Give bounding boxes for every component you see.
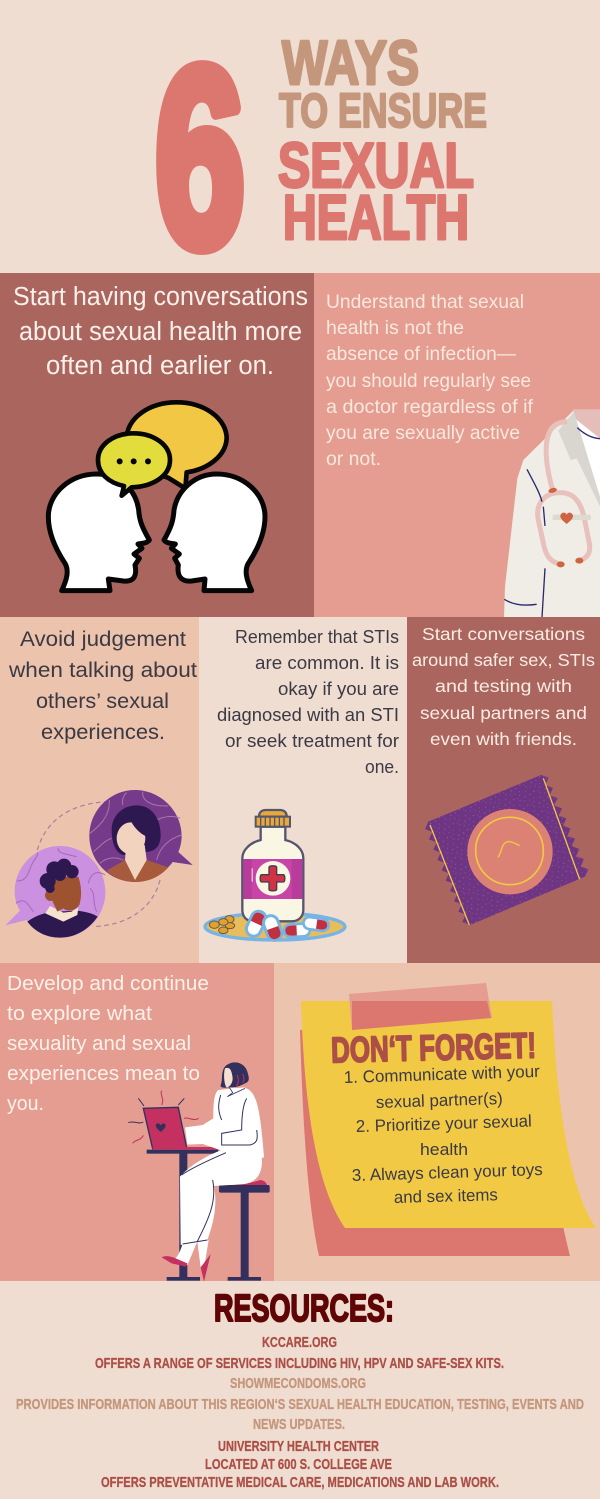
text: conversations	[13, 283, 308, 380]
text: avoid judgement	[8, 627, 197, 744]
text: explore sexuality	[7, 972, 209, 1115]
checklist: 3. Always clean your toys	[352, 1160, 543, 1185]
checklist	[344, 1062, 543, 1207]
text: conversations: often and earlier on.	[46, 352, 274, 380]
checklist: sexual partner(s)	[376, 1089, 503, 1112]
panel: start conversations around safer sex	[407, 617, 600, 963]
icon: two heads talking	[48, 402, 265, 591]
text: stis are common: are common. It is	[255, 653, 399, 673]
text: stis are common: Remember that STIs	[235, 627, 399, 647]
text: stis are common: or seek treatment for	[225, 731, 399, 751]
illustration: woman at laptop	[128, 1062, 270, 1282]
panel: start having conversations	[0, 273, 314, 617]
text: stis are common: diagnosed with an STI	[217, 705, 399, 725]
sticky note	[300, 983, 596, 1256]
resource: university health center: LOCATED AT 600 S. COLLEGE AVE	[205, 1457, 392, 1473]
panel: STIs are common	[199, 617, 407, 963]
checklist: health	[420, 1140, 468, 1159]
text: safer sex: even with friends.	[430, 729, 577, 749]
text: conversations: Start having conversations	[13, 283, 308, 311]
checklist: 1. Communicate with your	[344, 1062, 540, 1087]
title block	[155, 15, 487, 299]
illustration: condom packet	[425, 775, 588, 925]
text: regular doctor visits: Understand that sexual	[326, 291, 524, 313]
panel: avoid judgement	[0, 617, 199, 963]
text: regular doctor visits: absence of infection—	[326, 343, 516, 365]
man bubble	[5, 846, 105, 938]
text: avoid judgement: experiences.	[41, 720, 165, 744]
checklist: 2. Prioritize your sexual	[356, 1111, 532, 1136]
heading: resources: RESOURCES:	[214, 1288, 394, 1330]
text: regular doctor visits: health is not the	[326, 317, 464, 339]
text: explore sexuality: experiences mean to	[7, 1062, 200, 1085]
resource: kc care	[95, 1335, 504, 1372]
text: avoid judgement: others’ sexual	[36, 689, 169, 713]
text: explore sexuality: Develop and continue	[7, 972, 209, 995]
resource: university health center: UNIVERSITY HEALTH CENTER	[218, 1439, 379, 1455]
illustration: doctor with stethoscope	[504, 409, 600, 617]
heading: sexual: SEXUAL	[278, 131, 474, 201]
woman bubble	[89, 790, 193, 882]
heading: health: HEALTH	[283, 183, 469, 253]
heading: to ensure: TO ENSURE	[279, 85, 487, 138]
text: regular doctor visits: you are sexually active	[326, 422, 520, 444]
resource: show me condoms: SHOWMECONDOMS.ORG	[230, 1376, 366, 1392]
text: stis are common: one.	[365, 757, 399, 777]
resource: show me condoms	[16, 1376, 584, 1433]
text: avoid judgement: Avoid judgement	[20, 627, 186, 651]
resource: show me condoms: NEWS UPDATES.	[253, 1417, 345, 1433]
heading: ways: WAYS	[282, 29, 419, 98]
text: stis are common: okay if you are	[278, 679, 399, 699]
text: regular doctor visits	[326, 291, 534, 470]
panel: explore sexuality	[0, 963, 274, 1282]
text: safer sex: sexual partners and	[420, 703, 587, 723]
text: safer sex: around safer sex, STIs	[412, 650, 595, 670]
text: safer sex: and testing with	[435, 676, 572, 696]
resource: university health center	[101, 1439, 499, 1491]
text: safer sex	[412, 624, 595, 749]
illustration: two people in speech bubbles	[5, 790, 193, 938]
text: regular doctor visits: a doctor regardless of if	[326, 396, 534, 418]
text: explore sexuality: you.	[7, 1092, 44, 1115]
big numeral 6: 6	[155, 15, 245, 299]
text: conversations: about sexual health more	[19, 318, 302, 346]
text: regular doctor visits: you should regularly see	[326, 370, 531, 392]
text: avoid judgement: when talking about	[8, 658, 197, 682]
text: explore sexuality: sexuality and sexual	[7, 1032, 191, 1055]
text: stis are common	[217, 627, 399, 777]
text: safer sex: Start conversations	[422, 624, 585, 644]
panel: resources	[16, 1288, 584, 1491]
checklist: and sex items	[394, 1185, 498, 1207]
illustration: medicine bottle and pills	[205, 810, 345, 942]
resource: kc care: KCCARE.ORG	[262, 1335, 337, 1351]
text: regular doctor visits: or not.	[326, 448, 381, 470]
panel: see a doctor regularly	[314, 273, 600, 617]
panel: don't forget	[274, 963, 600, 1281]
text: explore sexuality: to explore what	[7, 1002, 152, 1025]
